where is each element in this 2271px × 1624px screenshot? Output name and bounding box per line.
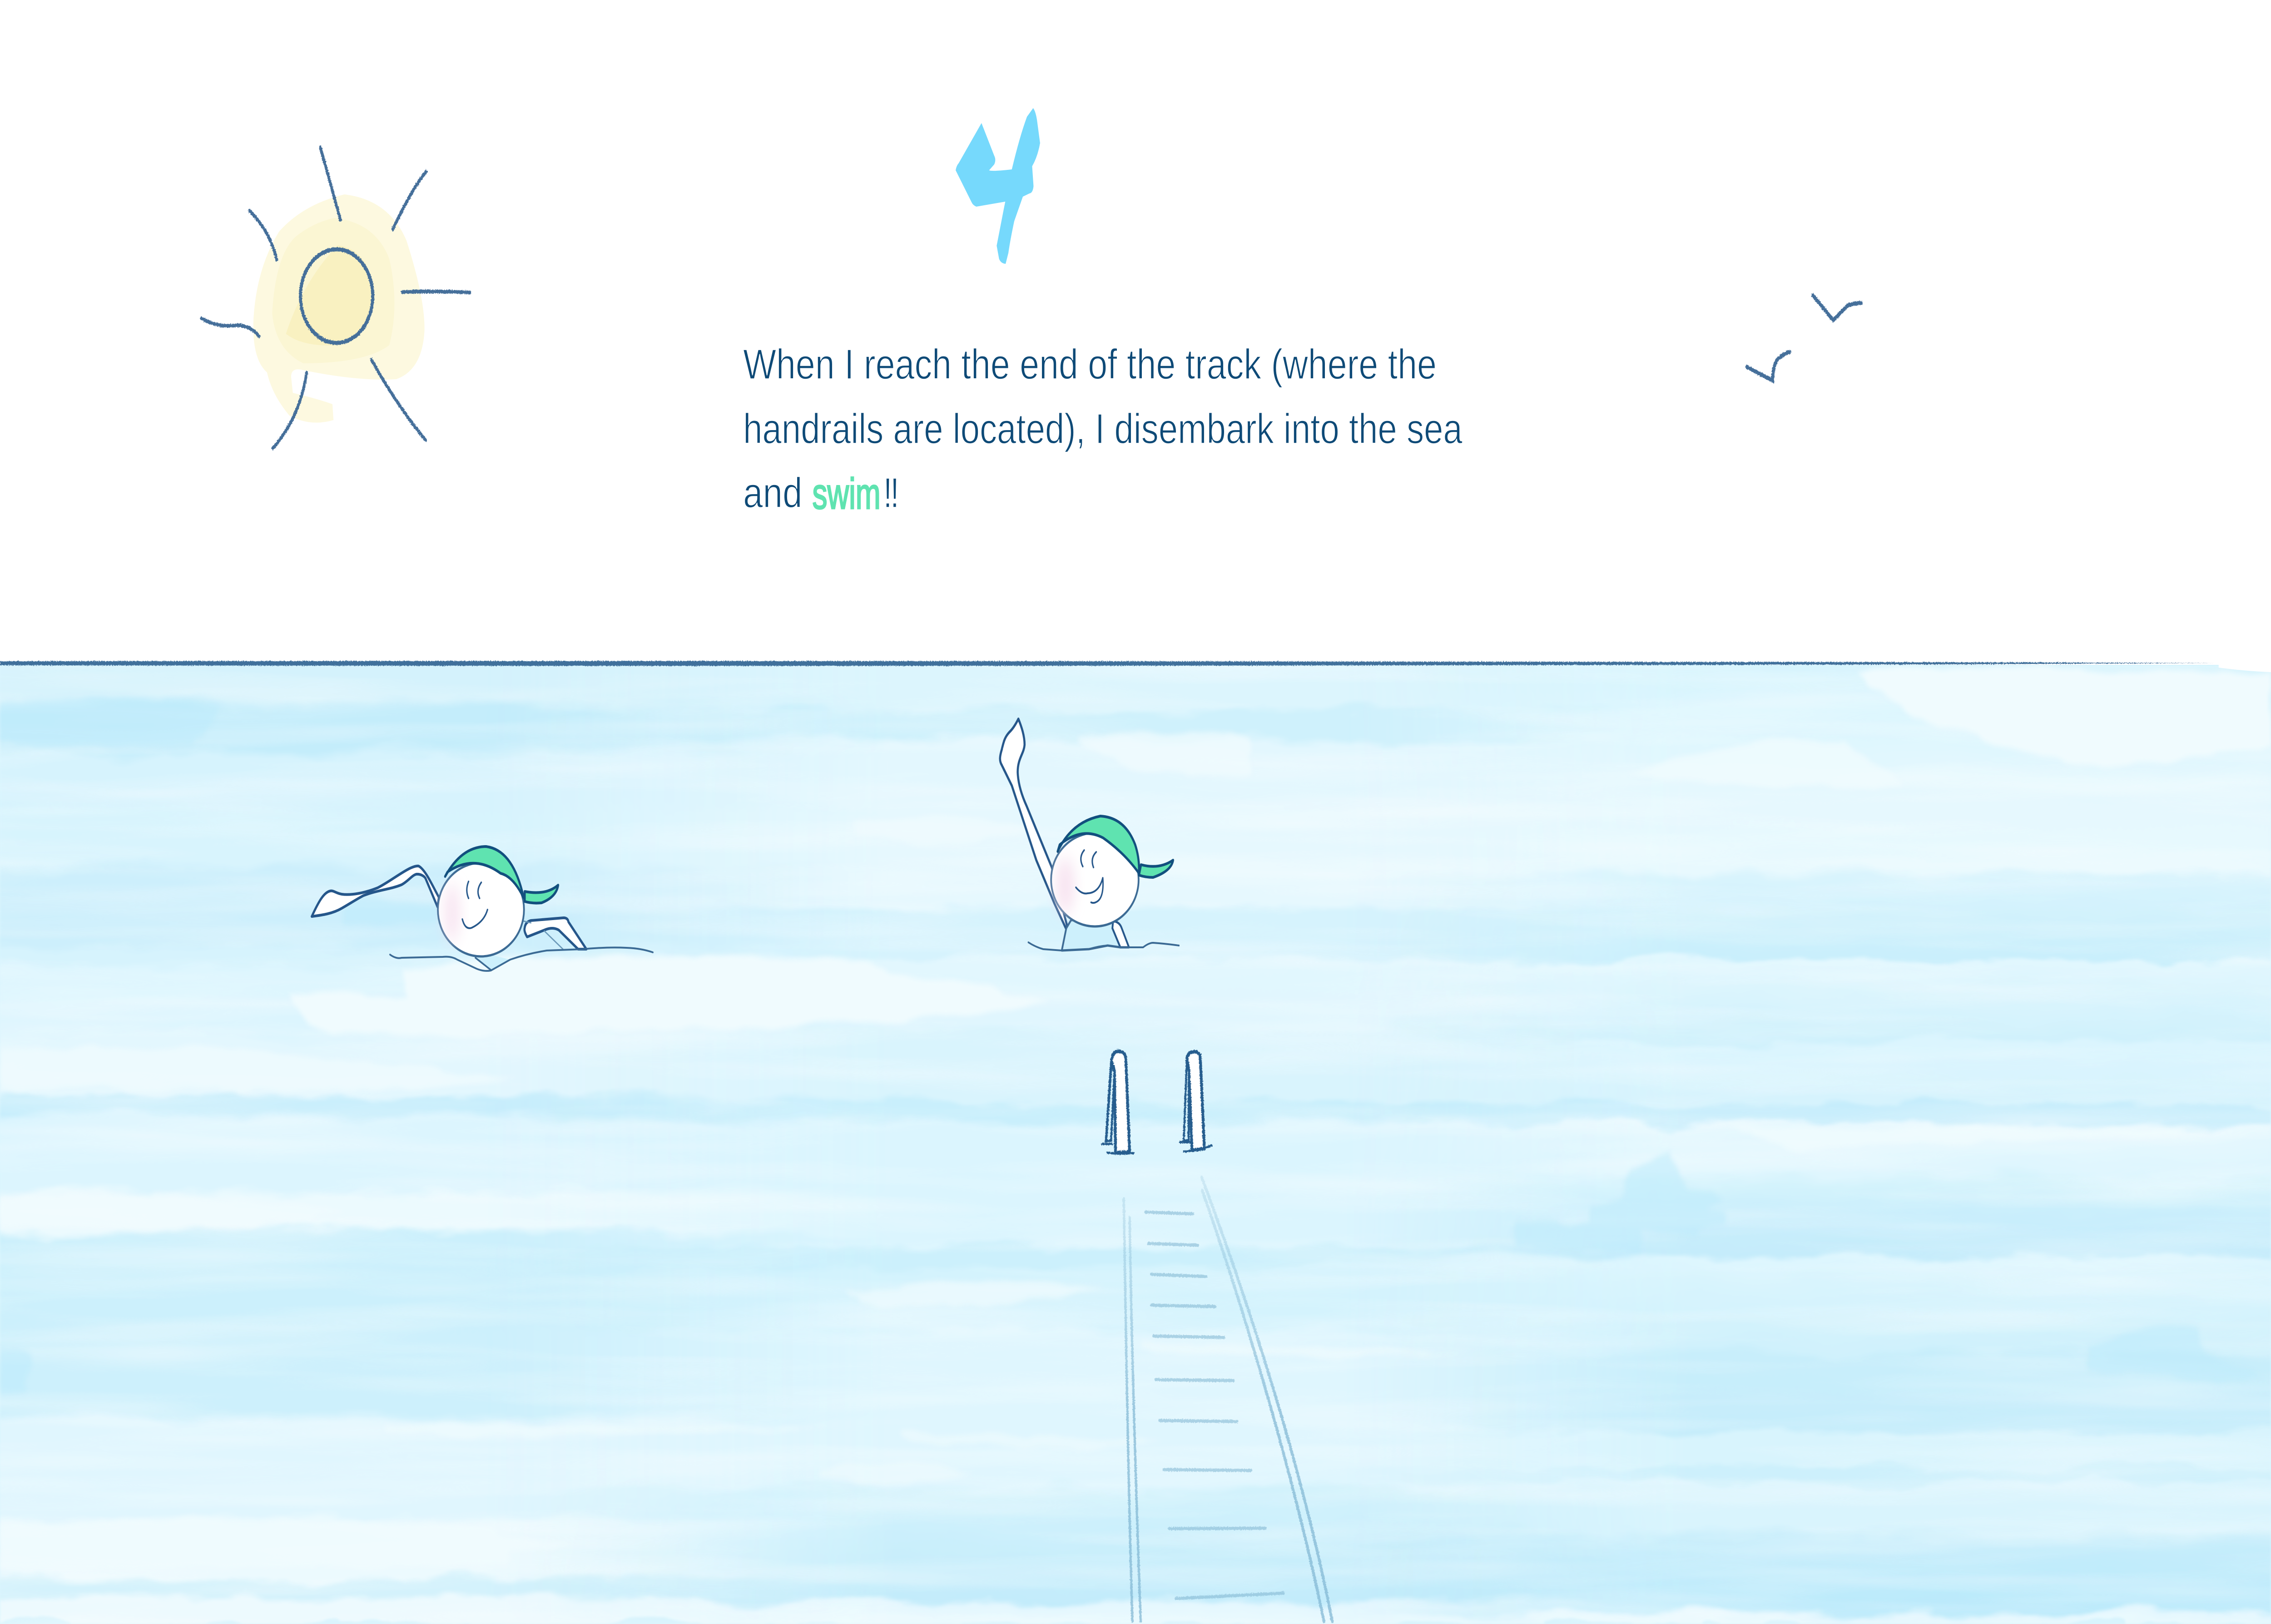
body: [1062, 920, 1121, 951]
birds: [1747, 295, 1861, 381]
sun: [202, 148, 470, 448]
water patch under swimmer: [476, 953, 510, 970]
bird left: [1747, 352, 1790, 381]
text block: When I reach the end of the track (where the: [743, 341, 1437, 388]
front arm: [312, 866, 439, 916]
text block: !!: [883, 470, 899, 516]
cap tail: [1139, 860, 1173, 877]
text block: and: [743, 470, 803, 516]
sea: watercolour wash: [0, 654, 2271, 1624]
top-right unpainted corner: [2219, 665, 2271, 672]
face: [1076, 850, 1103, 903]
handrails: [1102, 1051, 1212, 1154]
cap tail: [525, 885, 558, 903]
left rail: [1124, 1198, 1140, 1621]
raised arm: [1000, 719, 1068, 929]
text block: [743, 341, 1463, 518]
cheek: [444, 884, 460, 942]
swim cap: [1058, 816, 1139, 873]
bird right: [1813, 295, 1861, 320]
swimmer right: [1000, 719, 1179, 951]
head: [1051, 833, 1139, 926]
sun glow: [253, 194, 425, 423]
head: [438, 863, 524, 956]
swim cap: [445, 847, 524, 898]
sun outline and rays: [202, 148, 470, 448]
back arm: [525, 918, 586, 949]
text block: handrails are located), I disembark into the sea: [743, 406, 1463, 452]
handrail left: [1102, 1051, 1133, 1154]
sleepers: [1145, 1212, 1284, 1599]
step number 4: [956, 108, 1040, 264]
water line: [1028, 942, 1179, 951]
highlighted word swim: swim: [813, 470, 881, 518]
right arm: [1112, 921, 1129, 947]
horizon line: [0, 661, 2216, 666]
face: [462, 881, 487, 928]
submerged track: [1124, 1177, 1332, 1621]
swimmer left: [312, 847, 653, 971]
right rail: [1202, 1177, 1332, 1621]
water line: [390, 947, 653, 971]
darker wash patches: [0, 698, 2263, 1394]
lighter wash patches: [0, 669, 2271, 1569]
handrail right: [1180, 1052, 1212, 1151]
cheek: [1056, 857, 1074, 914]
